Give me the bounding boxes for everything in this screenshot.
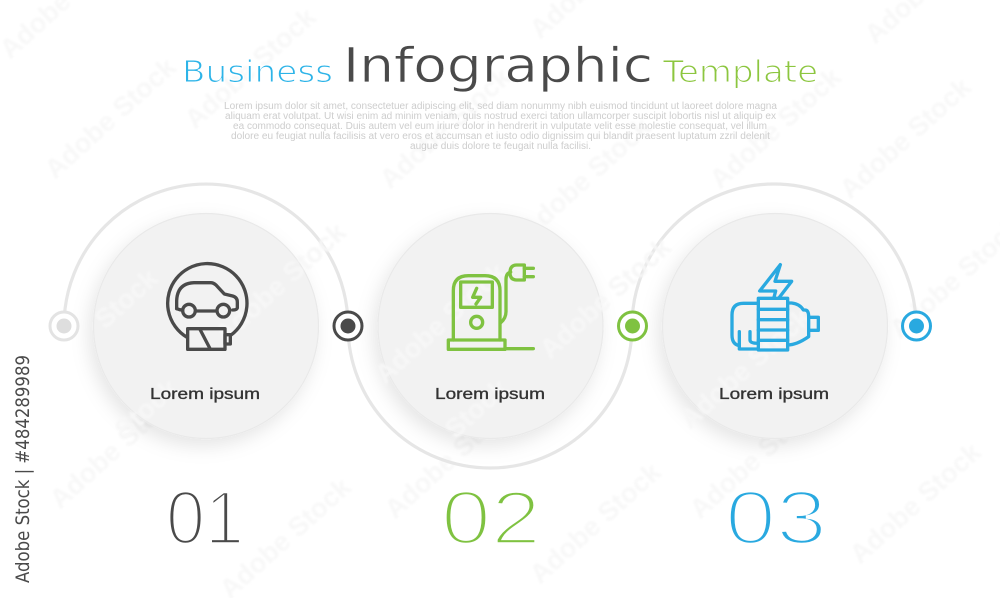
title — [182, 38, 818, 94]
text: Adobe Stock — [674, 301, 817, 434]
icon: car in circle with low battery — [168, 264, 247, 349]
intro paragraph: ea commodo consequat. Duis autem vel eum iriure dolor in hendrerit in vulputate velit esse molestie consequat, vel illum — [233, 121, 767, 132]
label: step 2: Lorem ipsum — [435, 386, 545, 403]
text: Stock — [439, 372, 514, 444]
stock id caption: Adobe Stock | #484289989 — [12, 355, 34, 583]
intro paragraph: Lorem ipsum dolor sit amet, consectetuer adipiscing elit, sed diam nonummy nibh euismod tincidunt ut laoreet dolore magna — [224, 101, 778, 112]
title word: Infographic: Infographic — [343, 38, 653, 94]
text: Adobe Stock — [514, 111, 657, 244]
intro paragraph: dolore eu feugiat nulla facilisis at vero eros et accumsan et iusto odio dignissim qui blandit praesent luptatum zzril delenit — [231, 131, 770, 142]
panel: step 3 circle — [662, 214, 888, 438]
text: Adobe Stock — [209, 216, 352, 349]
icon: electric charging station — [448, 265, 533, 349]
node: step 2 marker — [334, 312, 362, 340]
text: Adobe Stock — [379, 391, 522, 524]
text: Adobe Stock — [179, 1, 322, 134]
text: Stock — [109, 372, 184, 444]
node: step 3 marker — [618, 312, 646, 340]
text: Adobe Stock — [374, 61, 517, 194]
node: step 4 marker — [902, 312, 930, 340]
icon: electric motor with lightning bolt — [732, 265, 818, 350]
text: Adobe Stock — [524, 456, 667, 589]
number 03: 03 — [725, 476, 827, 561]
text: Adobe Stock — [369, 256, 512, 389]
text: Adobe Stock — [844, 436, 987, 569]
number 02: 02 — [441, 476, 541, 561]
number 01: 01 — [166, 476, 244, 561]
text: Adobe Stock — [534, 231, 677, 364]
title word: Template: Template — [662, 55, 818, 90]
panel: step 2 circle — [378, 214, 603, 438]
panel: step 1 circle — [94, 214, 318, 438]
label: step 1: Lorem ipsum — [150, 386, 260, 403]
text: Adobe Stock — [684, 391, 827, 524]
connecting timeline arc — [64, 184, 916, 468]
label: step 3: Lorem ipsum — [719, 386, 829, 403]
title word: Business: Business — [182, 55, 333, 90]
intro paragraph: augue duis dolore te feugait nulla facilisi. — [410, 141, 591, 152]
text: Adobe Stock — [834, 71, 977, 204]
text: Adobe Stock — [44, 381, 187, 514]
intro paragraph — [224, 101, 778, 152]
text: Stock — [89, 262, 164, 334]
intro paragraph: aliquam erat volutpat. Ut wisi enim ad minim veniam, quis nostrud exerci tation ullamcorper suscipit lobortis nisl ut aliquip ex — [225, 111, 776, 122]
text: Adobe Stock — [39, 51, 182, 184]
node: step 1 marker — [50, 312, 78, 340]
text: Adobe Stock — [704, 61, 847, 194]
